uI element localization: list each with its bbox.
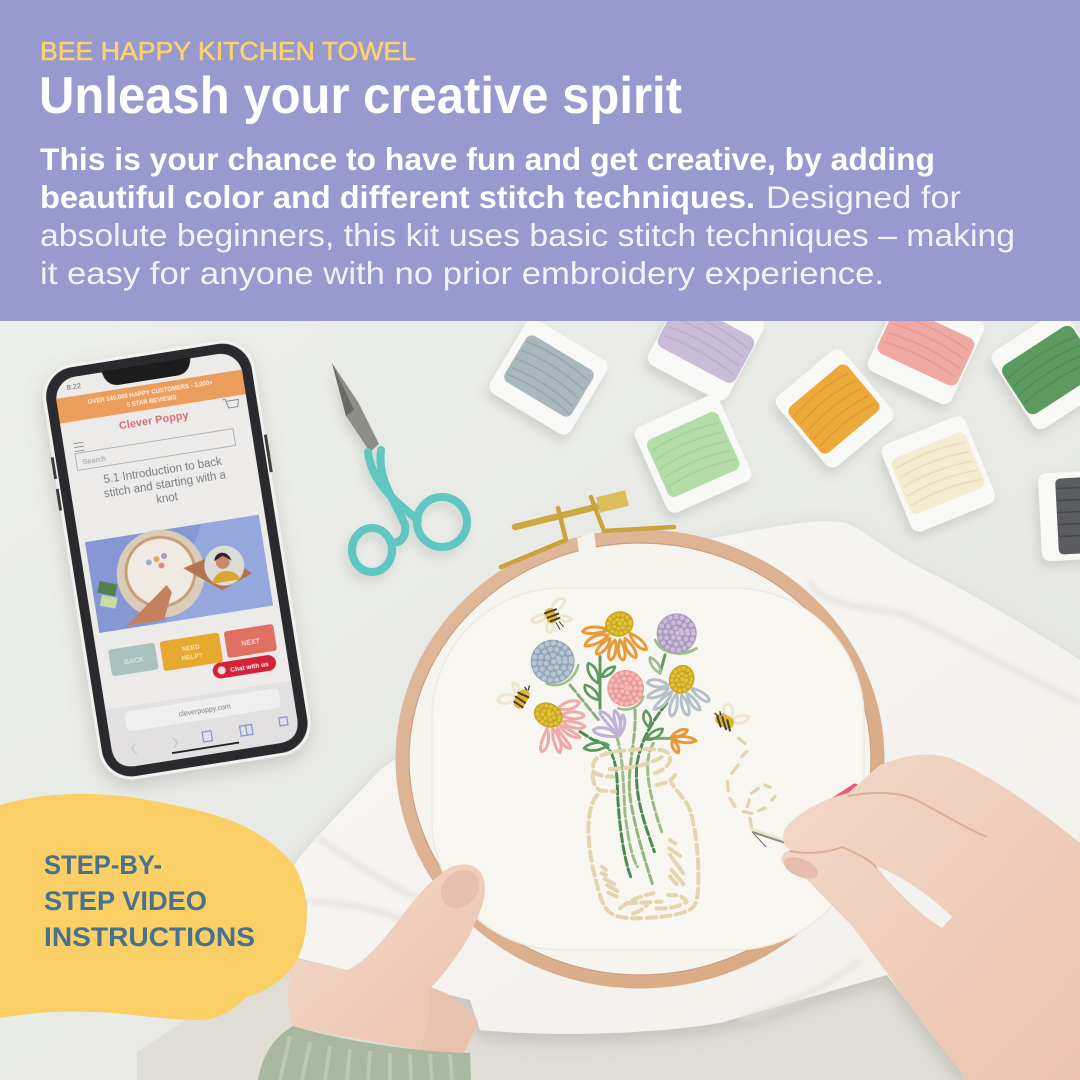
bobbin: blue grey	[486, 316, 611, 438]
eyebrow: BEE HAPPY KITCHEN TOWEL	[40, 36, 416, 66]
finger creases	[790, 793, 987, 868]
stems	[570, 655, 672, 885]
bobbin: pink	[865, 285, 987, 407]
pink daisy	[530, 698, 585, 753]
needle and thread	[752, 829, 780, 847]
jar raised stitches	[602, 840, 683, 897]
next button: NEXT	[241, 638, 261, 648]
need help button: HELP?	[181, 652, 203, 662]
towel seen between fingers	[876, 866, 952, 928]
url field: cleverpoppy.com	[178, 703, 231, 719]
bee: top left	[532, 599, 572, 633]
video thumbnail	[85, 514, 273, 633]
phone showing video lesson: 5 STAR REVIEWS	[127, 395, 177, 409]
teal handles	[352, 450, 467, 572]
logo: Clever Poppy	[118, 409, 190, 432]
bobbin: orange	[772, 345, 897, 471]
sleeve cuff	[258, 1026, 471, 1080]
hand: right stitching	[752, 754, 1080, 1080]
body copy: Designed for	[766, 179, 961, 215]
side buttons	[52, 424, 272, 511]
scissors	[332, 363, 467, 572]
floss tail behind fingers	[842, 846, 888, 866]
bobbin: light green	[632, 392, 754, 516]
browser bar	[105, 681, 301, 769]
back button: BACK	[124, 656, 145, 666]
body copy: absolute beginners, this kit uses basic stitch techniques – making	[40, 217, 1015, 253]
stabiliser outline on fabric	[432, 588, 864, 950]
thread bobbins	[486, 280, 1080, 562]
pink cluster flower	[607, 670, 644, 707]
hoop inner edge	[409, 543, 871, 975]
bee: right	[713, 704, 748, 731]
blue daisy	[647, 661, 709, 716]
yellow blob	[0, 794, 307, 1020]
chat pill: Chat with us	[230, 661, 270, 674]
home indicator	[172, 742, 239, 754]
next button	[224, 624, 277, 658]
phone showing video lesson	[38, 336, 315, 784]
callout text: STEP VIDEO	[44, 886, 207, 916]
browser icons	[131, 717, 289, 754]
bobbin: dark grey	[1038, 470, 1080, 562]
header background	[0, 0, 1080, 321]
hand: left holding hoop	[258, 862, 487, 1080]
left thumb and palm	[288, 864, 485, 1050]
body copy	[40, 141, 1015, 291]
bobbin: lilac	[645, 280, 767, 404]
search label: Search	[82, 454, 107, 467]
thumbnail	[433, 862, 487, 916]
fingers behind fabric	[410, 985, 478, 1056]
photo background: table	[0, 321, 1080, 1080]
callout text: INSTRUCTIONS	[44, 922, 255, 952]
blades	[332, 363, 379, 452]
bee: left	[498, 683, 532, 710]
header panel	[0, 0, 1080, 321]
towel lower shaded layer	[137, 945, 965, 1080]
leaves	[547, 640, 697, 751]
lilac tulip	[593, 711, 625, 737]
right hand shape	[782, 754, 1080, 1080]
banner text: OVER 140,000 HAPPY CUSTOMERS - 3,000+	[88, 380, 214, 406]
menu icon	[73, 442, 85, 452]
callout text	[44, 850, 255, 952]
brass hardware	[501, 497, 674, 567]
pink floss	[832, 787, 855, 802]
phone bezel	[42, 339, 312, 781]
back button	[108, 643, 159, 677]
thread trail from bee to needle	[727, 738, 775, 828]
lesson title	[101, 455, 230, 514]
linen towel	[292, 521, 1080, 1080]
bobbin: green	[988, 307, 1080, 433]
lesson title: 5.1 Introduction to back	[103, 456, 223, 486]
phone case	[38, 336, 315, 784]
hoop outer ring	[402, 536, 878, 982]
bobbin: cream	[879, 413, 998, 534]
lesson title: knot	[155, 491, 180, 506]
chat pill	[212, 654, 277, 680]
search box	[75, 429, 236, 470]
body copy: This is your chance to have fun and get creative, by adding	[40, 141, 935, 177]
embroidery hoop	[402, 497, 878, 982]
callout blob: video instructions	[0, 794, 307, 1020]
body copy: it easy for anyone with no prior embroidery experience.	[40, 255, 884, 291]
mason jar running stitch	[588, 749, 698, 918]
lesson title: stitch and starting with a	[103, 469, 227, 501]
blue cluster flower	[531, 640, 575, 684]
towel folds	[307, 580, 1080, 1018]
thumbnail right	[781, 853, 821, 883]
orange coneflower	[583, 608, 647, 660]
status time: 8:22	[66, 381, 82, 392]
need help button	[159, 632, 223, 671]
phone screen	[53, 351, 301, 769]
title: Unleash your creative spirit	[39, 67, 682, 125]
url field	[124, 688, 281, 732]
needle	[752, 832, 795, 846]
notch	[101, 357, 193, 387]
orange bud	[672, 729, 696, 753]
cart icon	[222, 397, 240, 409]
purple cluster flower	[657, 613, 697, 653]
hoop gap	[577, 532, 596, 553]
body copy: beautiful color and different stitch techniques.	[40, 179, 755, 215]
embroidered bouquet	[498, 599, 780, 918]
orange banner	[56, 369, 246, 424]
need help button: NEED	[181, 643, 201, 653]
callout text: STEP-BY-	[44, 850, 162, 880]
